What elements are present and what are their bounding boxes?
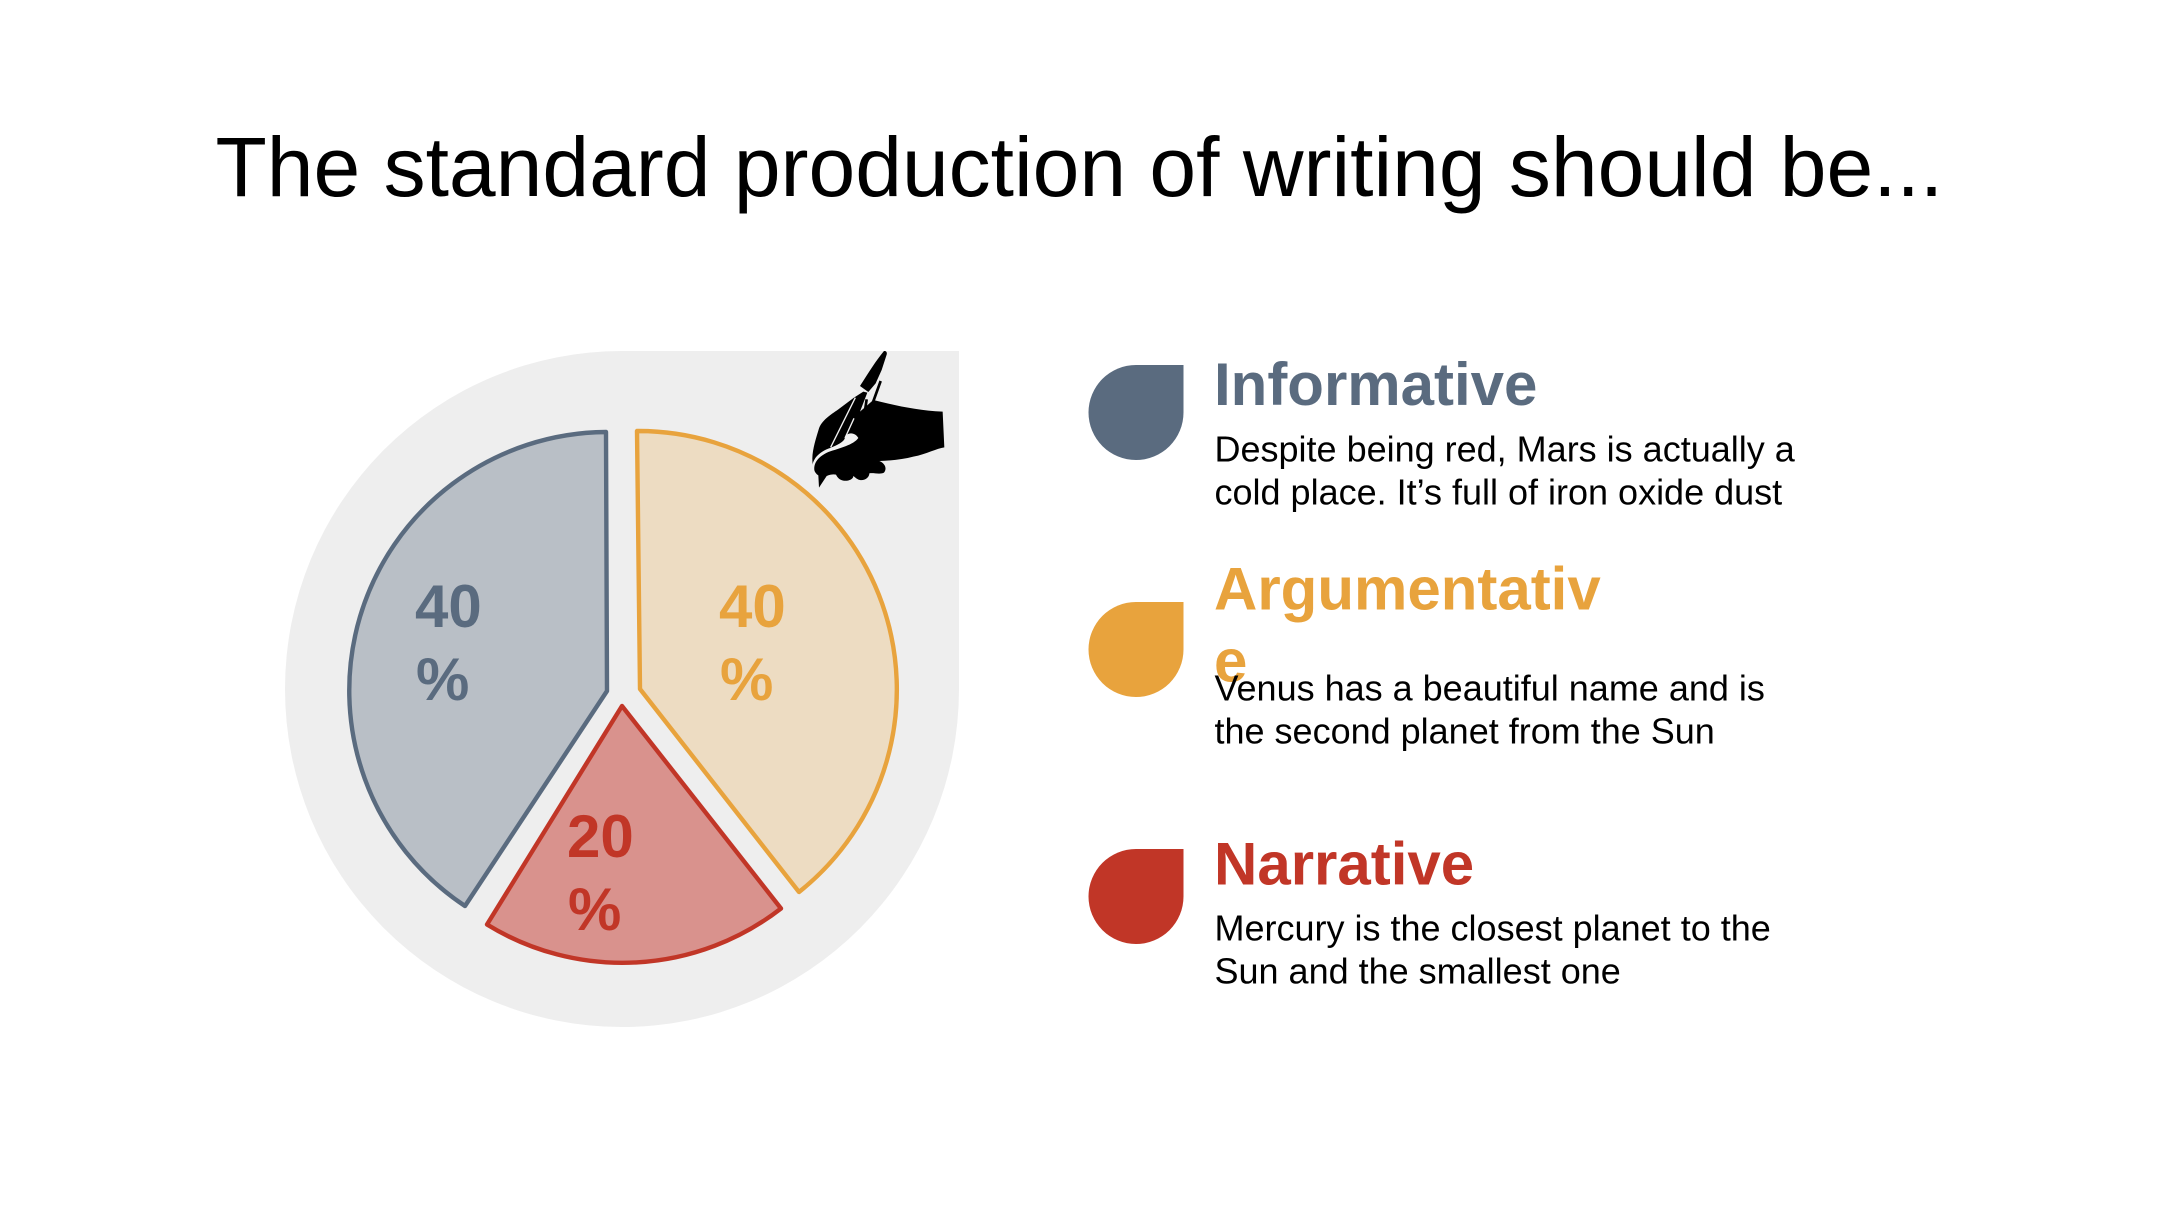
slice: narrative 20% bbox=[487, 706, 781, 963]
description: the second planet from the Sun bbox=[1214, 710, 1715, 752]
description: cold place. It’s full of iron oxide dust bbox=[1214, 472, 1782, 512]
title: The standard production of writing should be... bbox=[216, 120, 1943, 214]
legend item: argumentative bbox=[1088, 556, 1765, 752]
legend item: narrative bbox=[1088, 830, 1771, 992]
slice: narrative 20%: % bbox=[568, 876, 621, 943]
description: Venus has a beautiful name and is bbox=[1214, 668, 1765, 708]
slice: argumentative 40% bbox=[637, 431, 897, 892]
icon: orange drop bbox=[1088, 602, 1184, 697]
description: Mercury is the closest planet to the bbox=[1214, 908, 1771, 948]
description: Despite being red, Mars is actually a bbox=[1214, 428, 1796, 470]
description: Sun and the smallest one bbox=[1214, 950, 1621, 992]
heading: Informative bbox=[1214, 351, 1537, 418]
slice: informative 40% bbox=[349, 432, 607, 906]
icon: blue drop bbox=[1088, 365, 1184, 460]
background teardrop bbox=[285, 351, 959, 1027]
slice: informative 40%: % bbox=[416, 646, 469, 713]
slice: argumentative 40%: % bbox=[720, 646, 773, 713]
heading: Argumentativ bbox=[1214, 556, 1601, 622]
slice: informative 40%: 40 bbox=[415, 573, 482, 640]
panel: pie chart bbox=[285, 351, 959, 1027]
icon: red drop bbox=[1088, 849, 1184, 944]
heading: e bbox=[1214, 628, 1247, 694]
heading: Narrative bbox=[1214, 830, 1474, 898]
slice: argumentative 40%: 40 bbox=[719, 573, 786, 640]
legend item: informative bbox=[1088, 351, 1796, 512]
slice: narrative 20%: 20 bbox=[567, 803, 634, 870]
icon: hand writing with pen bbox=[812, 351, 944, 488]
